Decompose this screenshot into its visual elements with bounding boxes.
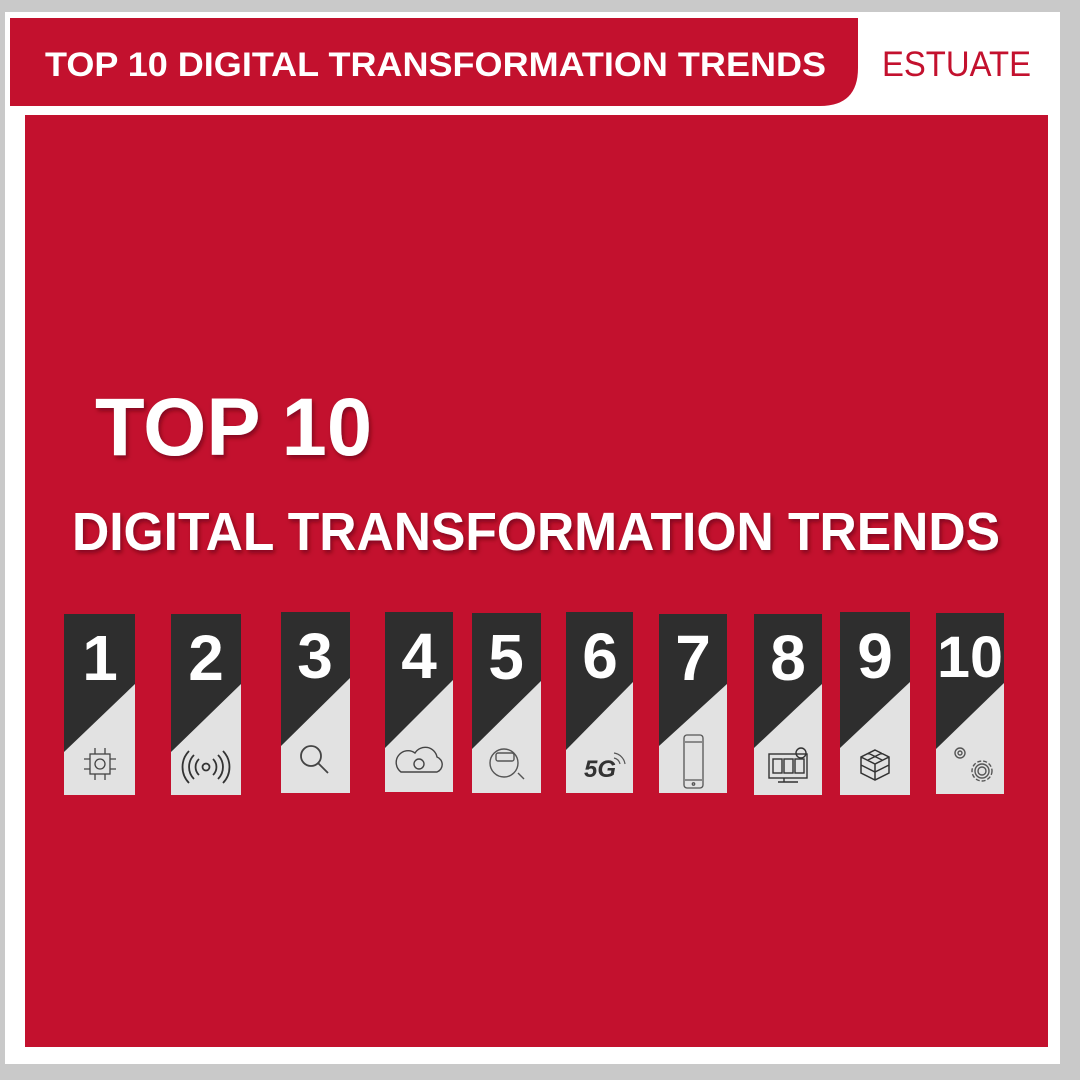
card 10: gears: 10 — [937, 625, 1003, 690]
card 4: cloud — [385, 612, 453, 792]
card 8: monitor dashboard: 8 — [770, 622, 806, 694]
card 6: 5G: 5G — [584, 756, 616, 783]
card 5: VR headset — [472, 613, 541, 793]
card 9: blocks: 9 — [857, 620, 893, 692]
card 1: AI chip: 1 — [82, 622, 118, 694]
card 2: wireless — [171, 614, 241, 795]
card 9: blocks — [840, 612, 910, 795]
card 2: wireless: 2 — [188, 622, 224, 694]
card 1: AI chip — [64, 614, 135, 795]
card 3: analytics search: 3 — [297, 620, 333, 692]
card 7: smartphone: 7 — [675, 622, 711, 694]
card 5: VR headset: 5 — [488, 621, 524, 693]
card 6: 5G — [566, 612, 633, 793]
main title: TOP 10: TOP 10 — [95, 382, 372, 473]
card 7: smartphone — [659, 614, 727, 793]
card 8: monitor dashboard — [754, 614, 822, 795]
card 10: gears — [936, 613, 1004, 794]
card 6: 5G: 6 — [582, 620, 618, 692]
subtitle: DIGITAL TRANSFORMATION TRENDS — [72, 502, 1000, 562]
card 3: analytics search — [281, 612, 350, 793]
card 4: cloud: 4 — [401, 620, 437, 692]
header title: TOP 10 DIGITAL TRANSFORMATION TRENDS — [45, 46, 826, 84]
header band — [10, 18, 858, 106]
trend cards row — [64, 612, 1004, 795]
brand logo text: ESTUATE — [882, 45, 1031, 84]
